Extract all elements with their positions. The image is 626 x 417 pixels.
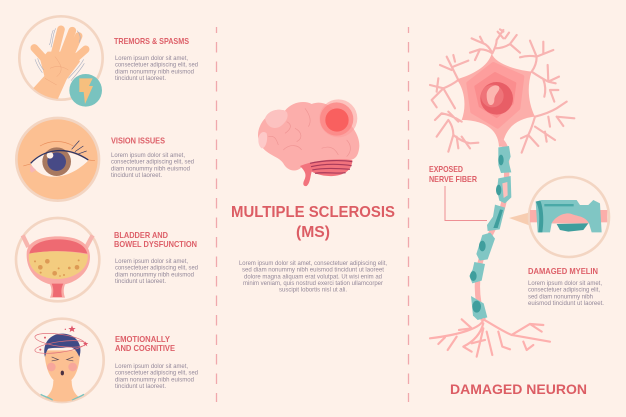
text block: vision: Lorem ipsum dolor sit amet, <box>111 153 185 159</box>
icon: trembling hand <box>19 16 103 107</box>
heading: damaged neuron: DAMAGED NEURON <box>450 381 587 397</box>
text block: emotional: consectetuer adipiscing elit, sed <box>115 371 198 377</box>
text block: myelin <box>528 281 604 307</box>
text block: myelin: sed diam nonummy nibh <box>528 294 593 300</box>
text block: intro: minim veniam, quis nostrud exerci tation ullamcorper <box>243 281 383 287</box>
text block: bladder <box>115 259 198 285</box>
text block: tremors: Lorem ipsum dolor sit amet, <box>115 56 188 62</box>
heading: emotional: AND COGNITIVE <box>115 344 175 353</box>
heading: exposed nerve fiber: EXPOSED <box>429 165 463 174</box>
neuron cell body <box>430 29 574 153</box>
title <box>231 204 395 241</box>
text block: bladder: tincidunt ut laoreet. <box>115 279 166 285</box>
text block: bladder: consectetuer adipiscing elit, sed <box>115 266 198 272</box>
text block: myelin: euismod tincidunt ut laoreet. <box>528 301 604 307</box>
title: (MS) <box>296 224 330 241</box>
heading: exposed nerve fiber <box>429 165 477 184</box>
text block: intro <box>239 261 387 294</box>
heading: emotional: EMOTIONALLY <box>115 335 170 344</box>
text block: vision: consectetuer adipiscing elit, sed <box>111 160 194 166</box>
icon: bladder <box>16 218 99 301</box>
heading: emotional <box>115 335 175 353</box>
text block: vision: diam nonummy nibh euismod <box>111 166 190 172</box>
axon with damaged myelin <box>469 140 511 320</box>
icon: dizzy head <box>20 319 104 407</box>
text block: emotional: Lorem ipsum dolor sit amet, <box>115 364 188 370</box>
text block: emotional: tincidunt ut laoreet. <box>115 384 166 390</box>
heading: bladder: BLADDER AND <box>114 231 168 240</box>
heading: exposed nerve fiber: NERVE FIBER <box>429 175 477 184</box>
text block: vision: tincidunt ut laoreet. <box>111 173 162 179</box>
heading: bladder <box>114 231 197 249</box>
text block: tremors: tincidunt ut laoreet. <box>115 76 166 82</box>
text block: tremors <box>115 56 198 82</box>
text block: emotional <box>115 364 198 390</box>
text block: intro: dolore magna aliquam erat volutpat. Ut wisi enim ad <box>244 274 382 280</box>
callout line <box>445 186 487 220</box>
text block: bladder: diam nonummy nibh euismod <box>115 272 194 278</box>
icon: eye <box>16 118 99 201</box>
heading: damaged myelin: DAMAGED MYELIN <box>528 267 598 276</box>
text block: bladder: Lorem ipsum dolor sit amet, <box>115 259 188 265</box>
heading: vision: VISION ISSUES <box>111 136 165 146</box>
text block: intro: sed diam nonummy nibh euismod tincidunt ut laoreet <box>242 268 384 274</box>
text block: myelin: Lorem ipsum dolor sit amet, <box>528 281 602 287</box>
heading: tremors: TREMORS & SPASMS <box>114 37 189 46</box>
text block: intro: suscipit lobortis nisl ut ali. <box>279 288 347 294</box>
text block: emotional: diam nonummy nibh euismod <box>115 377 194 383</box>
text block: vision <box>111 153 194 179</box>
text block: myelin: consectetuer adipiscing elit, <box>528 288 600 294</box>
icon: damaged myelin close-up <box>509 177 609 257</box>
text block: intro: Lorem ipsum dolor sit amet, consectetuer adipiscing elit, <box>239 261 387 267</box>
text block: tremors: consectetuer adipiscing elit, sed <box>115 63 198 69</box>
icon: brain <box>258 99 359 186</box>
title: MULTIPLE SCLEROSIS <box>231 204 395 221</box>
axon terminal branches <box>430 319 550 357</box>
heading: bladder: BOWEL DYSFUNCTION <box>114 240 197 249</box>
illustration: damaged neuron <box>430 29 574 357</box>
text block: tremors: diam nonummy nibh euismod <box>115 69 194 75</box>
